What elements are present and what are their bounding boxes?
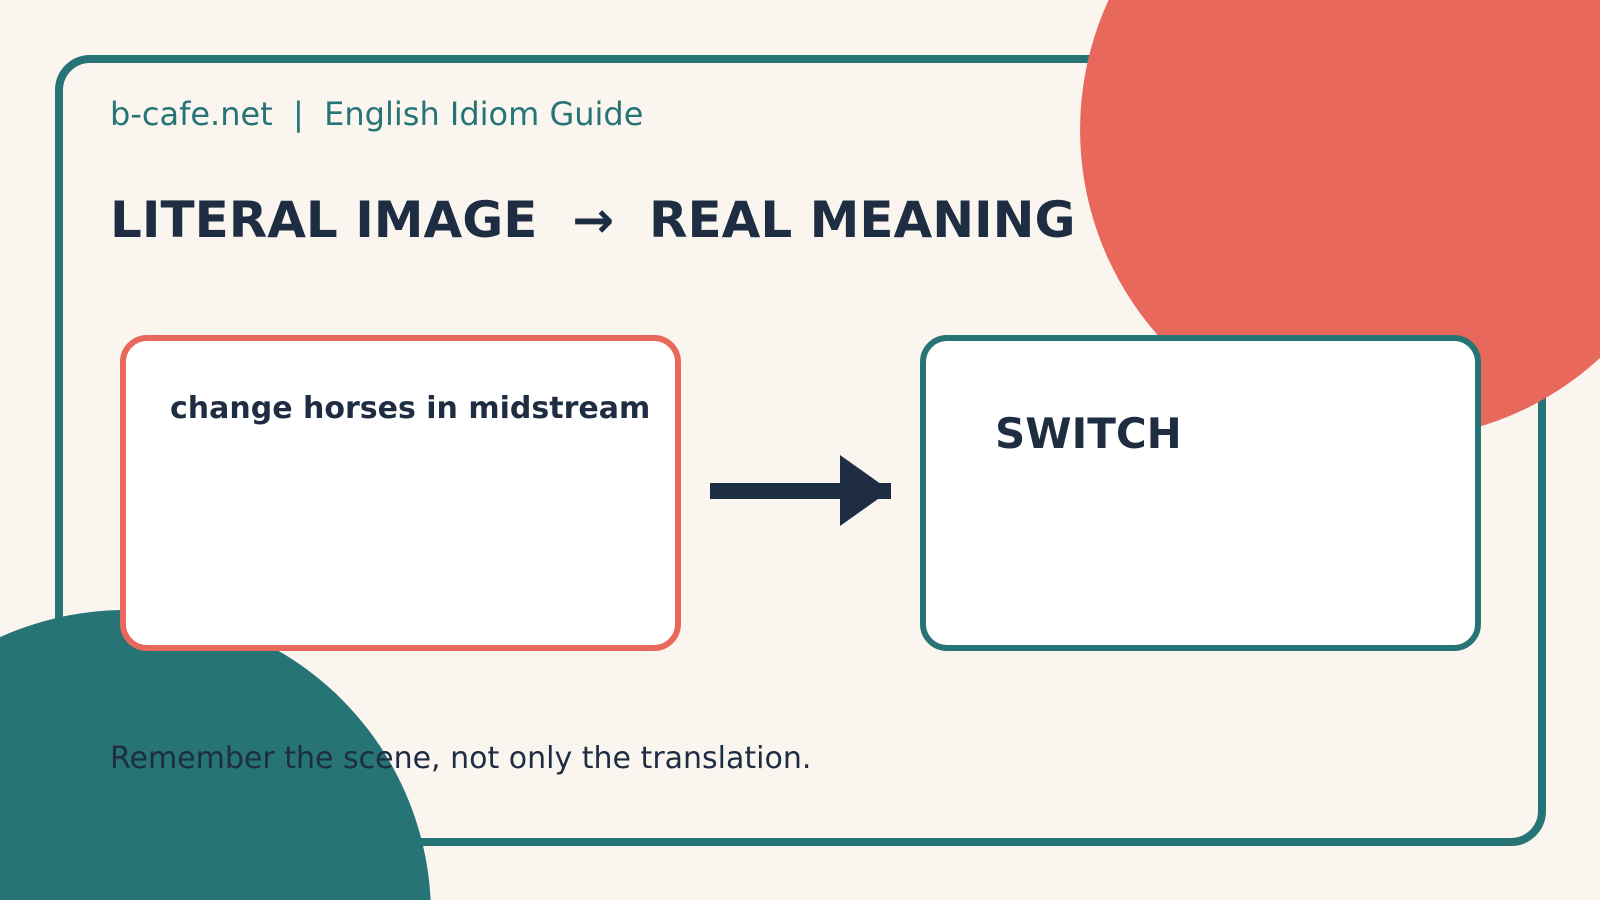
footer note: Remember the scene, not only the translation. bbox=[110, 741, 811, 776]
title: LITERAL IMAGE → REAL MEANING bbox=[110, 191, 1076, 249]
decorative circle: coral top right bbox=[1080, 0, 1600, 440]
idiom text: change horses in midstream bbox=[170, 391, 650, 426]
arrow bbox=[710, 455, 891, 526]
decorative circle: teal bottom left bbox=[0, 610, 431, 900]
site label: b-cafe.net | English Idiom Guide bbox=[110, 95, 643, 133]
panel: real meaning card bbox=[923, 338, 1478, 648]
meaning text: SWITCH bbox=[995, 409, 1182, 458]
panel: literal idiom card bbox=[123, 338, 678, 648]
